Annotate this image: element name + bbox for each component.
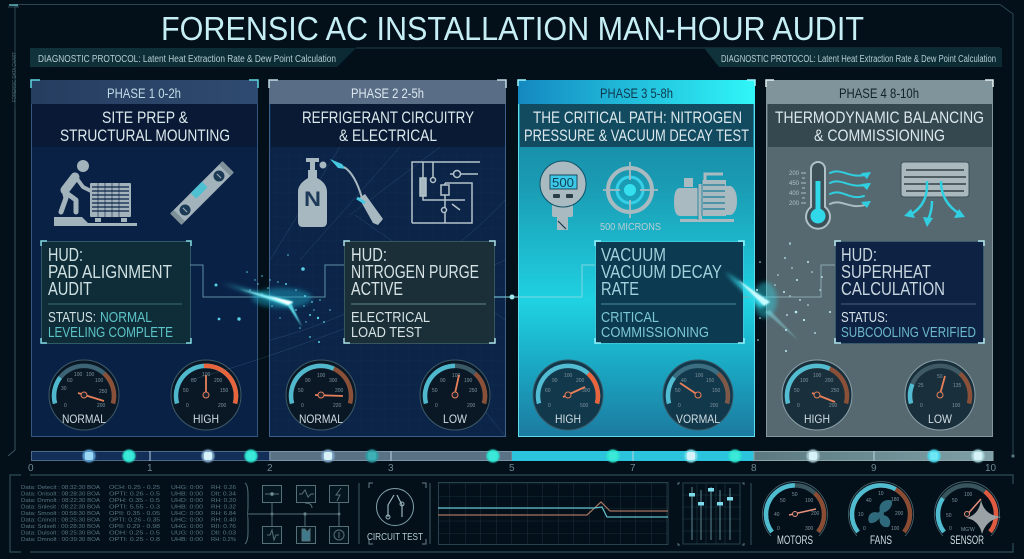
gauge: phase 4 high: 200 [825,378,834,384]
gauge: phase 3 high: HIGH [555,412,581,426]
gauge: phase 3 high: 300 [582,388,591,394]
gauge: motors: MOTORS [777,533,813,547]
HUD box: pad alignment: HUD: [48,245,83,265]
gauge: phase 4 low: 135 [953,383,962,389]
sparkle [966,500,1001,534]
data log table: RH: 0.32 [211,504,236,510]
phase 1 header [31,80,258,104]
phase 4 heading: THERMODYNAMIC BALANCING [775,108,984,127]
gauge: motors [762,482,828,547]
HUD box: nitrogen purge: NITROGEN PURGE [351,262,479,282]
data log table: UHD: 0:00 [171,498,203,504]
energy burst: phase 3 to 4 [725,242,831,352]
gauge: fans: 0 [863,526,866,532]
gauge: phase 3 high: 60 [545,388,551,394]
HUD box: nitrogen purge: LOAD TEST [351,324,422,341]
HUD box: vacuum decay [595,241,744,344]
corner ticks [766,80,993,87]
gauge: motors: 200 [811,511,820,517]
gauge: motors: 50 [792,492,798,498]
timeline hour labels: 1 [147,463,153,474]
phase 2 header: PHASE 2 2-5h [351,85,424,101]
timeline bar [28,450,997,474]
gauge: phase 2 normal: 0 [301,403,304,409]
phase 2 heading [271,104,505,147]
outer frame [8,4,1014,458]
timeline hour labels: 9 [871,463,877,474]
gauge: phase 2 low: 50 [432,388,438,394]
protocol strip left [30,48,1000,67]
corner ticks [269,80,506,88]
gauge: phase 4 high: 200 [829,403,838,409]
gauge: phase 2 normal: 90 [305,378,311,384]
connector: phase 2 to phase 3 [494,265,595,300]
gauge: phase 1 normal: 100 [95,378,104,384]
phase 2 heading: REFRIGERANT CIRCUITRY [302,108,474,127]
circuit test icon and label [367,483,426,544]
timeline hour labels: 3 [388,463,394,474]
gauge: phase 2 normal [286,360,356,430]
icon: thermometer with heat waves: 400 [789,191,800,197]
icon: thermometer with heat waves: 200 [789,171,800,177]
icon: target 500 microns [600,162,661,233]
title: FORENSIC AC INSTALLATION MAN-HOUR AUDIT [161,10,864,47]
gauge: phase 1 high: 200 [218,403,227,409]
data log table: Data: Dmnolt : 00:39:30 BOA [21,537,100,543]
data log table: OPTI: 0.26 - 0.5 [109,492,160,498]
gauge: motors: 100 [805,498,814,504]
gauge: phase 2 low: 0 [435,403,438,409]
gauge: motors: 50 [780,498,786,504]
gauge: sensor: MG'W [961,527,975,533]
phase 4 heading [768,104,992,147]
HUD box: vacuum decay: CRITICAL [601,309,659,326]
data log table: Data: Dulsolt : 08:25:30 BOA [21,530,100,536]
side label: FORENSIC DATA CHART [12,52,18,102]
gauge: phase 1 normal [49,360,119,430]
icon: digital pressure gauge: 500 [552,175,574,190]
data log table: OCH: 0.25 - 0.25 [109,485,160,491]
gauge: phase 3 normal: 200 [710,403,719,409]
gauge: phase 3 high [533,360,603,430]
data log table: Data: Dnmolt : 08:22:30 BOA [21,498,100,504]
icon: nitrogen cylinder [298,158,327,227]
gauge: phase 1 high: HIGH [193,412,219,426]
bottom console frame [10,475,1013,552]
divider [750,483,752,545]
connector: phase 3 to phase 4 [743,265,835,297]
gauge: phase 2 normal: 300 [329,378,338,384]
icon: spirit level [170,161,234,225]
gauge: phase 2 low: LOW [443,412,468,426]
HUD box: pad alignment: NORMAL [100,309,152,326]
HUD box: pad alignment [41,241,191,344]
phase 3 heading: PRESSURE & VACUUM DECAY TEST [524,126,749,145]
gauge: phase 2 normal: 200 [335,388,344,394]
gauge: phase 3 high: 90 [552,378,558,384]
data log table: RH: 0.20 [211,498,236,504]
gauge: phase 2 low: 90 [440,378,446,384]
data log table: OPII: 0.29 - 0.98 [109,524,160,530]
HUD box: nitrogen purge: ELECTRICAL [351,309,430,326]
gauge: phase 1 normal: 0 [64,403,67,409]
HUD box: vacuum decay: VACUUM DECAY [601,262,722,282]
icon: air vent with airflow [901,162,969,227]
HUD box: superheat: CALCULATION [841,279,945,299]
phase 1 heading: STRUCTURAL MOUNTING [60,126,230,145]
data log table [21,485,236,543]
phase 4 header [766,80,993,104]
phase 3 header [518,80,755,104]
gauge: phase 1 normal: 100 [74,372,83,378]
phase 1 heading [32,104,257,147]
gauge: motors: 40 [774,512,780,518]
timeline track [32,451,993,461]
HUD box: pad alignment: PAD ALIGNMENT [48,262,172,282]
gauge: sensor: 0 [949,526,952,532]
gauge: fans: 10 [858,512,864,518]
data log table: RII: 0.76 [211,524,236,530]
HUD box: vacuum decay: VACUUM [601,245,666,265]
timeline hour labels: 10 [985,463,997,474]
gauge: fans: 40 [866,498,872,504]
gauge: phase 4 high: 250 [831,388,840,394]
data log table: UHC: 0:00 [171,511,203,517]
HUD box: pad alignment: LEVELING COMPLETE [48,324,173,341]
slider bank [678,483,744,545]
gauge: fans [848,482,914,547]
data log table: UHG: 0:00 [171,485,203,491]
data log table: Dll: 0.03 [211,530,236,536]
timeline nodes [82,450,984,462]
data log table: UUG: 0:00 [171,530,203,536]
gauge: phase 1 normal: 250 [99,389,108,395]
data log table: Data: Detecit : 08:32:30 BOA [21,485,100,491]
icon: nitrogen cylinder: N [304,188,321,211]
gauge: sensor: 100 [964,492,973,498]
data log table: RH: 6.84 [211,511,236,517]
protocol strip left: DIAGNOSTIC PROTOCOL: Latent Heat Extraction Rate & Dew Point Calculation [38,54,336,65]
icon: thermometer with heat waves: 200 [789,201,800,207]
data log table: UHB: 0:00 [171,492,203,498]
gauge: phase 3 normal: 50 [675,388,681,394]
gauge: phase 3 normal [663,360,733,430]
HUD box: superheat: STATUS: [841,309,888,326]
gauge: phase 4 low [905,360,975,430]
HUD box: pad alignment: AUDIT [48,279,92,299]
gauge: phase 1 normal: 30 [61,386,67,392]
HUD box: vacuum decay: COMMISSIONING [601,324,709,341]
HUD box: superheat [835,241,984,344]
gauge: phase 3 normal: VORMAL [676,412,720,426]
gauge: fans: 180 [891,497,900,503]
HUD box: superheat: SUPERHEAT [841,262,931,282]
gauge: sensor: 50 [952,498,958,504]
line chart [438,482,668,544]
connector: phase 1 to phase 2 [190,265,344,297]
gauge: phase 4 high: 0 [797,403,800,409]
circuit block diagram [245,483,348,544]
data log table: OPTI: 0.25 - 0.8 [109,537,160,543]
timeline hour labels: 7 [630,463,636,474]
phase 3 heading: THE CRITICAL PATH: NITROGEN [533,108,742,127]
phase 1 header: PHASE 1 0-2h [107,85,181,101]
data log table: UHB: 0:00 [171,504,203,510]
data log table: OPTI: 5.55 - 0.3 [109,504,160,510]
gauge: phase 3 normal: 150 [712,388,721,394]
gauge: phase 1 high: 50 [183,388,189,394]
divider: circuit test left [359,483,430,544]
data log table: Dlt: 0.34 [211,492,236,498]
energy burst: phase 1 to 2 [214,254,331,343]
data log table: UHG: 0:00 [171,524,203,530]
gauge: phase 1 high: 100 [202,372,211,378]
gauge: phase 4 high: HIGH [804,412,830,426]
gauge: phase 4 low: 50 [937,374,943,380]
gauge: phase 2 normal: NORMAL [299,412,343,426]
gauge: phase 3 normal: 0 [678,403,681,409]
gauge: phase 1 high [171,360,241,430]
HUD box: superheat: HUD: [841,245,877,265]
gauge: phase 2 low: 250 [469,388,478,394]
gauge: phase 3 high: 0 [548,403,551,409]
gauge: phase 1 high: 80 [191,378,197,384]
gauge: phase 4 low: 100 [952,403,961,409]
phase 2 header [269,80,506,104]
phase 3 header: PHASE 3 5-8h [600,85,673,101]
HUD box: pad alignment: STATUS: [48,309,96,326]
data log table: UHC: 0:00 [171,518,203,524]
gauge: phase 4 high: 100 [813,373,822,379]
timeline hour labels: 5 [509,463,515,474]
gauge: fans: 200 [895,511,904,517]
HUD box: superheat: SUBCOOLING VERIFIED [841,324,976,341]
HUD box: nitrogen purge: ACTIVE [351,279,403,299]
data log table: RH: 0.40 [211,518,236,524]
data log table: Data: Cnincit : 08:25:30 BOA [21,518,100,524]
gauge: sensor: 50 [946,513,952,519]
gauge: sensor [934,482,1001,547]
gauge: phase 1 normal: 200 [97,403,106,409]
gauge: phase 2 low: 190 [464,378,473,384]
data log table: Data: Snlselt : 00:28:30 BOA [21,524,100,530]
phase 1 heading: SITE PREP & [102,108,189,127]
blueprint grid overlay [190,147,505,436]
gauge: phase 1 high: 150 [220,388,229,394]
phase 4 heading: & COMMISSIONING [814,126,945,145]
gauge: fans: FANS [870,533,892,547]
phase 2 heading: & ELECTRICAL [339,126,437,145]
HUD box: nitrogen purge: HUD: [351,245,387,265]
gauge: phase 1 normal: NORMAL [62,412,106,426]
gauge: phase 1 normal: 100 [86,372,95,378]
icon: fan [868,500,892,527]
gauge: phase 3 high: 200 [576,378,585,384]
panel: phase 1 [31,80,258,436]
gauge: phase 2 normal: 220 [333,403,342,409]
gauge: phase 1 high: 0 [186,403,189,409]
gauge: fans: 10 [878,491,884,497]
gauge: sensor: SENSOR [950,533,984,547]
gauge: phase 4 low: 0 [920,403,923,409]
data log table: OPH: 0.35 - 0.5 [109,498,160,504]
gauge: phase 3 normal: 150 [706,378,715,384]
gauge: phase 3 normal: 40 [681,378,687,384]
icon: circuit schematic [412,162,480,223]
icon: thermometer with heat waves [789,162,871,229]
data log table: Data: Onlsolt : 08:28:30 BOA [21,492,100,498]
gauge: phase 2 low [420,360,490,430]
gauge: phase 3 normal: 100 [695,373,704,379]
HUD box: nitrogen purge [344,241,495,344]
gauge: phase 2 low: 100 [452,373,461,379]
gauge: motors: 300 [805,526,814,532]
gauge: phase 2 low: 200 [467,403,476,409]
corner ticks [31,80,258,88]
phase 3 heading [520,104,753,147]
gauge: phase 4 low: 25 [918,383,924,389]
timeline hour labels: 0 [28,463,34,474]
data log table: OPII: 0.35 - 0.05 [109,511,160,517]
panel: phase 3 [518,80,755,436]
timeline hour labels: 8 [751,463,757,474]
circuit test icon and label: CIRCUIT TEST [367,531,423,543]
data log table: Data: Smoolt : 00:58:30 BOA [21,511,100,517]
data log table: UHB: 0:00 [171,537,203,543]
data log table: RH: 0.2% [211,537,236,543]
gauge: phase 4 high: 50 [794,388,800,394]
icon: worker and condenser unit [54,160,137,226]
data log table: ODH: 0.25 - 0.5 [109,530,160,536]
gauge: motors: 0 [777,526,780,532]
gauge: phase 4 high: 100 [800,378,809,384]
corner ticks [518,80,755,86]
gauge: phase 4 low: LOW [928,412,953,426]
timeline hour labels [28,463,997,474]
HUD box: vacuum decay: RATE [601,279,639,299]
protocol strip right [704,48,1002,67]
phase 4 header: PHASE 4 8-10h [839,85,919,101]
gauge: phase 1 high: 200 [214,378,223,384]
gauge: phase 4 high [782,360,852,430]
gauge: phase 1 normal: 60 [67,378,73,384]
icon: target 500 microns: 500 MICRONS [600,222,661,233]
gauge: phase 3 high: 100 [564,373,573,379]
gauge: fans: 100 [891,526,900,532]
data log table: RH: 0.26 [211,485,236,491]
icon: thermometer with heat waves: 450 [789,181,800,187]
icon: digital pressure gauge [540,161,586,230]
panel: phase 4 [766,80,993,436]
timeline hour labels: 2 [267,463,273,474]
data log table: OPTI: 0.26 - 0.35 [109,518,160,524]
icon: vacuum pump [674,174,737,222]
panel: phase 2 [190,80,506,436]
gauge: phase 2 normal: 100 [317,373,326,379]
data log table: Data: Snlesit : 08:22:30 BOA [21,504,100,510]
icon: brazing torch [330,159,383,225]
gauge: phase 3 high: 500 [580,403,589,409]
gauge: phase 2 normal: 50 [298,388,304,394]
